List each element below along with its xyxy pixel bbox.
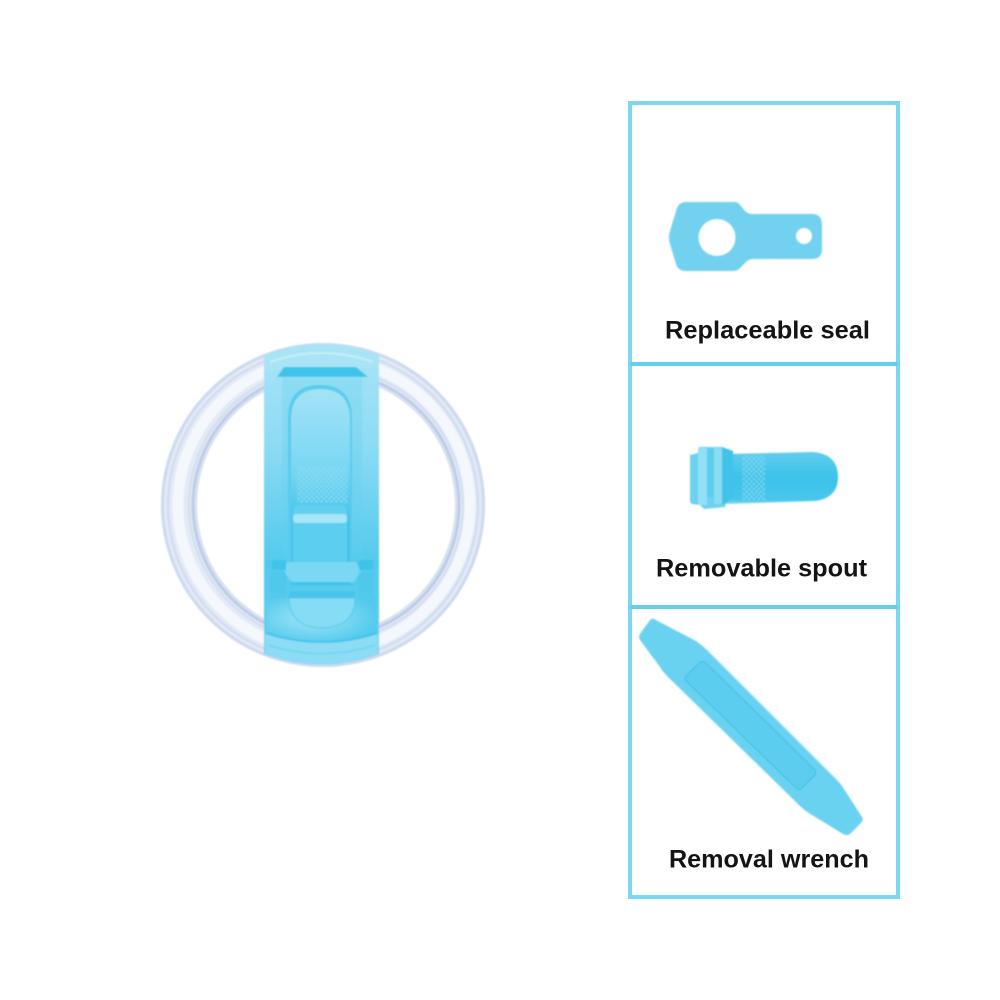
spout head <box>690 447 734 509</box>
label: removable spout: Removable spout <box>656 554 868 582</box>
mouth arc <box>289 598 355 628</box>
lower grooves <box>270 572 374 598</box>
label: removal wrench: Removal wrench <box>669 846 869 874</box>
spout body <box>725 452 838 504</box>
icon: removal wrench <box>639 619 863 835</box>
top clip slot <box>277 367 368 377</box>
spout pill <box>288 385 352 585</box>
divider <box>630 362 898 366</box>
panel: accessories frame <box>630 103 898 897</box>
lid product photo <box>161 343 485 667</box>
hinge base <box>284 562 361 582</box>
grip texture <box>742 456 765 500</box>
band top rim <box>265 346 378 372</box>
lower band block <box>267 598 377 642</box>
band inner panel <box>282 378 362 560</box>
side tabs <box>272 560 373 570</box>
textured grip <box>297 467 347 503</box>
spout lever <box>293 505 347 565</box>
translucent blue band <box>264 344 379 664</box>
bottom rim <box>265 634 378 664</box>
icon: removable spout <box>690 447 838 509</box>
wrench recessed label <box>685 662 816 790</box>
clear lid ring <box>161 343 485 667</box>
label: replaceable seal: Replaceable seal <box>665 316 870 344</box>
icon: replaceable seal <box>669 202 822 271</box>
